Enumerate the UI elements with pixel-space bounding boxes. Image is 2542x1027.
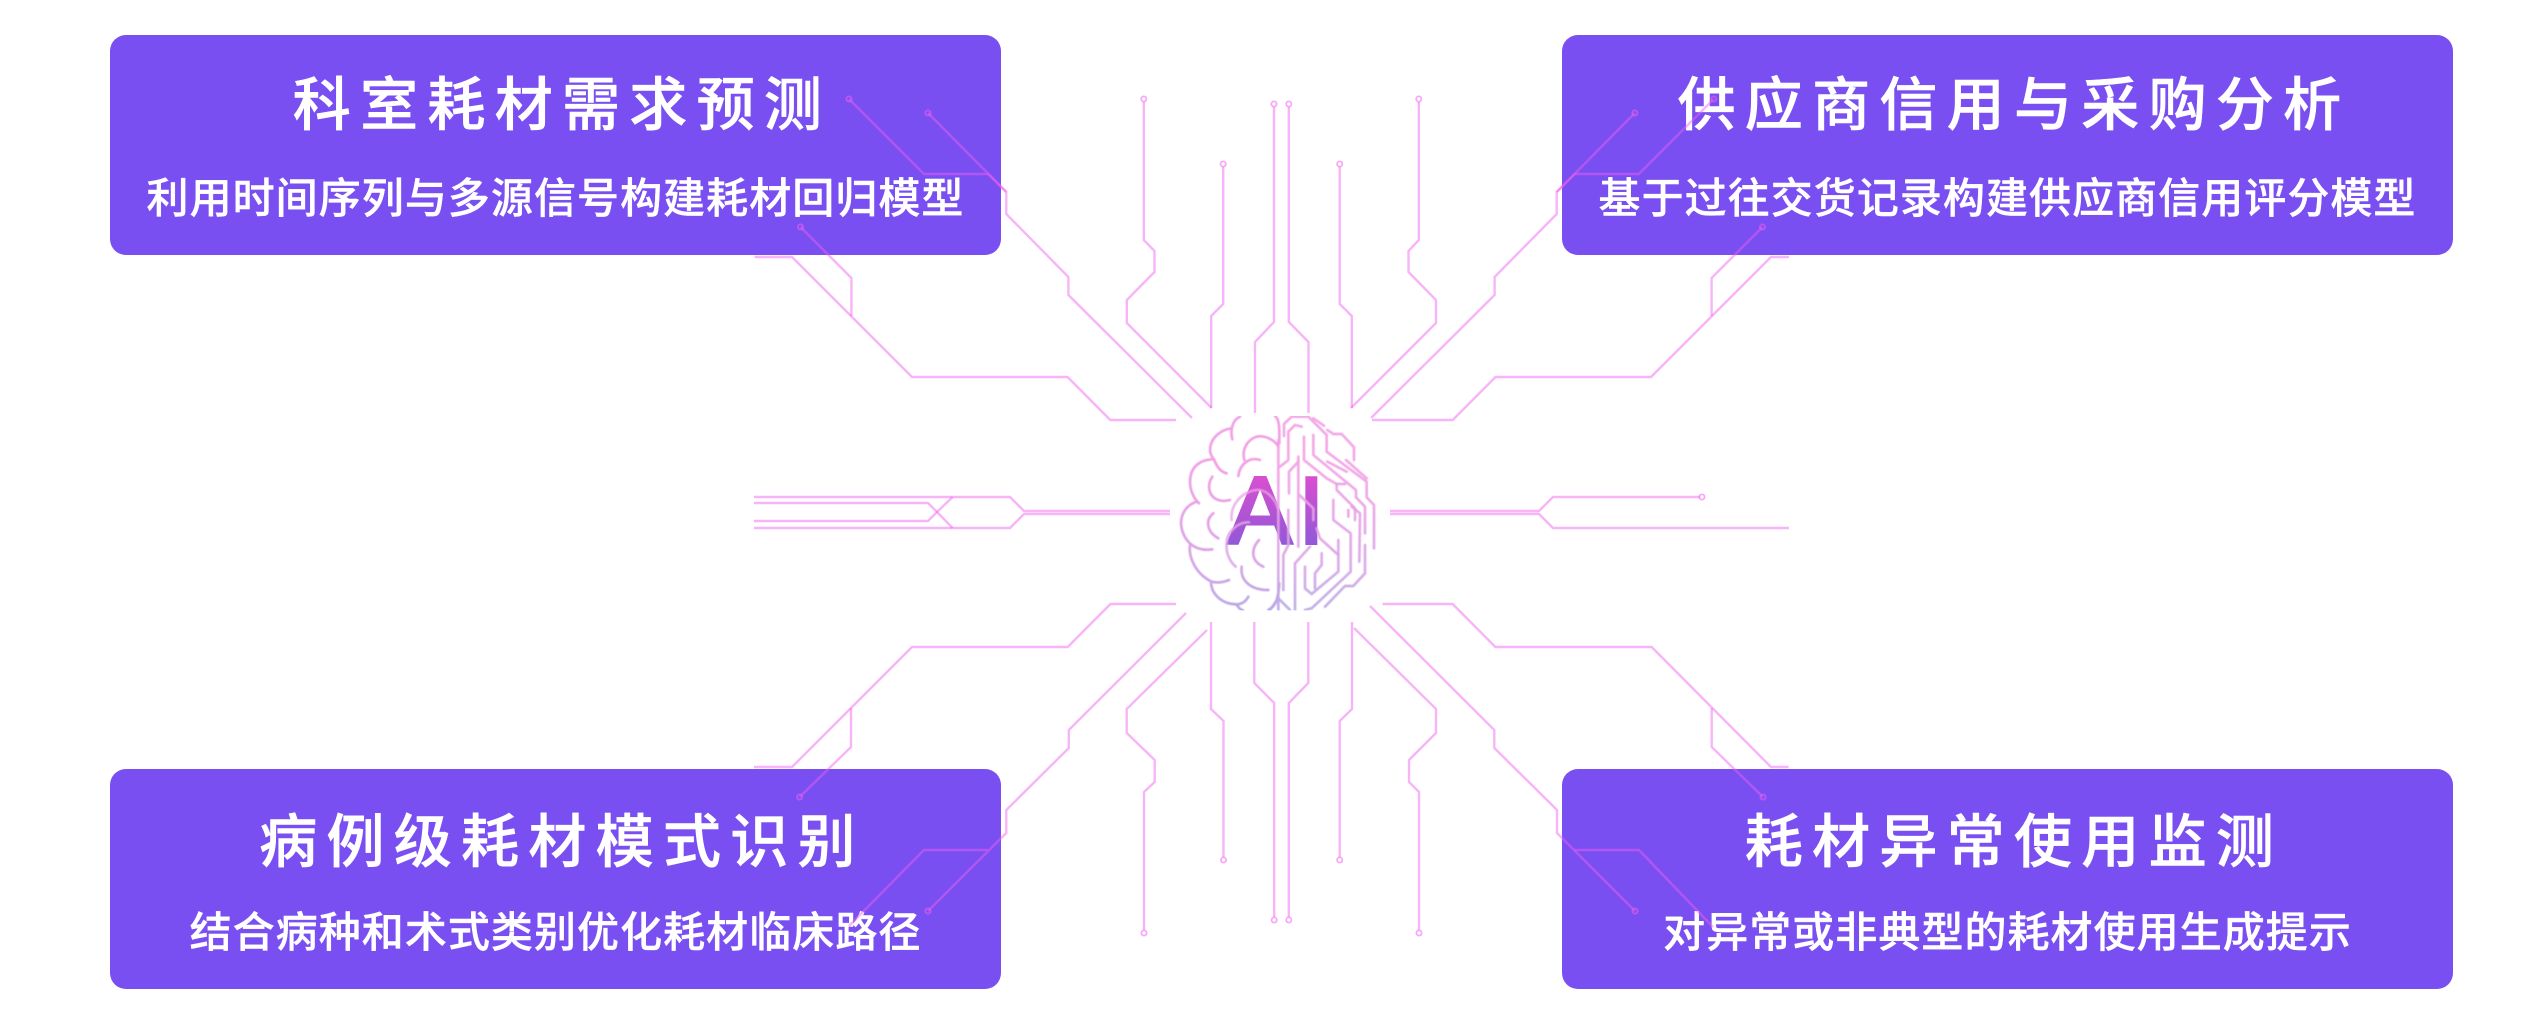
panel: department consumable demand forecast bbox=[110, 35, 1001, 255]
heading: supplier credit analysis: 供应商信用与采购分析 bbox=[1677, 73, 2350, 138]
heading: department demand forecast: 科室耗材需求预测 bbox=[293, 73, 831, 138]
panel: case level consumable pattern recognition bbox=[110, 769, 1001, 989]
icon: brain with circuit half bbox=[1181, 416, 1374, 611]
traces: bottom vertical bbox=[1127, 622, 1436, 936]
text: pattern recognition description: 结合病种和术式类别优化耗材临床路径 bbox=[190, 909, 921, 956]
text: demand forecast description: 利用时间序列与多源信号构建耗材回归模型 bbox=[147, 175, 964, 222]
label: AI: AI bbox=[1228, 458, 1331, 564]
traces: top right bbox=[1371, 96, 1789, 420]
heading: case level pattern recognition: 病例级耗材模式识别 bbox=[259, 810, 865, 875]
traces: bottom right bbox=[1370, 604, 1789, 927]
traces: bottom left bbox=[754, 604, 1186, 926]
circuit traces and AI brain graphic bbox=[754, 96, 1789, 936]
text: abnormal use description: 对异常或非典型的耗材使用生成提示 bbox=[1663, 909, 2352, 956]
panel: abnormal consumable use monitoring bbox=[1562, 769, 2453, 989]
traces: top left bbox=[754, 96, 1192, 420]
traces: top vertical bbox=[1127, 96, 1436, 413]
panel: supplier credit and purchasing analysis bbox=[1562, 35, 2453, 255]
traces: right horizontal bbox=[1390, 494, 1789, 528]
text: supplier credit description: 基于过往交货记录构建供应商信用评分模型 bbox=[1599, 175, 2416, 222]
heading: abnormal use monitoring: 耗材异常使用监测 bbox=[1745, 810, 2283, 875]
traces: left horizontal bbox=[754, 497, 1170, 528]
